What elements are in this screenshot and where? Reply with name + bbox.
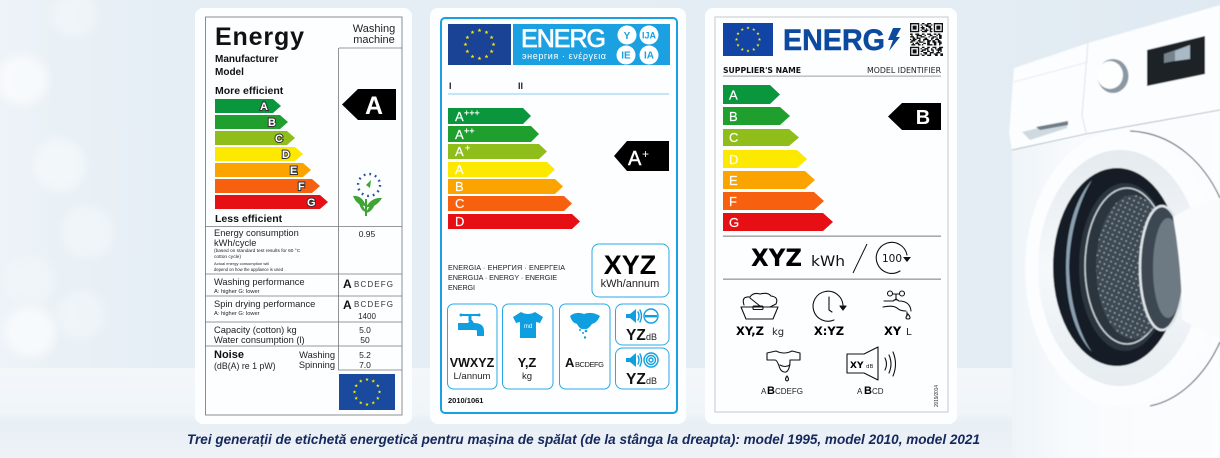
multilingual energy text: ENERGIJA · ENERGY · ENERGIE — [448, 273, 557, 282]
spinning noise box — [616, 348, 669, 389]
icon: EU flag — [723, 23, 773, 56]
capacity icon and value: kg — [772, 327, 784, 338]
annual consumption box: XYZ — [604, 250, 656, 280]
noise row: (dB(A) re 1 pW) — [214, 361, 276, 371]
energy scale bars: D — [455, 214, 464, 229]
energy consumption row: depend on how the appliance is used — [214, 267, 284, 272]
energy banner: ENERG — [521, 25, 606, 53]
noise icon and value: B — [864, 385, 872, 397]
icon: wet shirt — [570, 313, 600, 339]
display — [1147, 36, 1205, 86]
duration icon and value: X:YZ — [814, 324, 844, 338]
energy per 100 cycles — [751, 242, 911, 273]
panel: 2021 label card — [705, 8, 957, 424]
bokeh lights — [0, 0, 114, 357]
icon: EU flag — [448, 24, 511, 65]
water consumption box — [448, 304, 497, 389]
spin efficiency box — [560, 304, 610, 389]
energy banner: IE — [621, 50, 631, 62]
washing performance row — [214, 277, 393, 295]
program knob — [1097, 59, 1128, 93]
energy consumption row: (based on standard test results for 60 °C — [214, 248, 301, 254]
regulation number: 2010/1061 — [448, 396, 483, 405]
spin efficiency box: BCDEFG — [575, 360, 604, 369]
energy scale bars: B — [268, 117, 276, 129]
rating arrow B: B — [916, 107, 930, 129]
energy scale bars: A — [260, 101, 268, 113]
duration icon and value — [813, 291, 846, 338]
spin drying performance row: 1400 — [358, 312, 376, 321]
noise row: Noise — [214, 349, 244, 361]
energy scale bars: B — [455, 179, 464, 194]
noise icon and value — [847, 347, 896, 397]
icon: 100 cycles: 100 — [882, 253, 902, 265]
model identifier: MODEL IDENTIFIER — [867, 66, 941, 75]
door handle — [1173, 198, 1220, 338]
capacity box — [502, 304, 553, 389]
water icon and value — [883, 291, 912, 338]
spin class icon and value: A — [761, 387, 767, 396]
energy scale bars: G — [307, 197, 316, 209]
noise icon and value: XY — [850, 361, 864, 371]
energy per 100 cycles: XYZ — [751, 244, 802, 272]
energy consumption row: cotton cycle) — [214, 254, 241, 260]
spin drying performance row — [214, 298, 393, 321]
table lines — [205, 48, 402, 370]
supplier and model placeholders: I — [449, 81, 452, 91]
spinning noise box: dB — [646, 376, 657, 386]
noise row: 7.0 — [359, 360, 371, 370]
water consumption box: VWXYZ — [450, 356, 495, 370]
capacity and water rows: 50 — [360, 335, 370, 345]
noise icon and value: dB — [866, 364, 873, 370]
capacity and water rows: Capacity (cotton) kg — [214, 325, 297, 335]
water icon and value: L — [906, 327, 912, 338]
energy scale bars: +++ — [464, 108, 480, 118]
energy scale bars: C — [729, 130, 738, 145]
machine body — [1012, 100, 1220, 458]
capacity and water rows: 5.0 — [359, 325, 371, 335]
icon: laundry basket — [741, 293, 778, 319]
energy scale bars: A — [455, 127, 464, 142]
energy banner: энергия · ενέργεια — [522, 51, 606, 61]
icon: speaker and spin cycle — [626, 353, 658, 367]
icon: QR code — [910, 23, 943, 56]
energy scale bars: A — [455, 144, 464, 159]
heading: ENERG — [783, 24, 885, 57]
icon: water tap — [458, 314, 484, 336]
water consumption box: L/annum — [454, 371, 491, 382]
rating arrow A+: A — [628, 148, 642, 170]
washing noise box — [616, 304, 669, 345]
energy scale bars: A — [729, 88, 738, 102]
washing performance row: BCDEFG — [354, 280, 393, 289]
energy per 100 cycles: kWh — [811, 254, 845, 270]
multilingual energy text: ENERGIA · ЕНЕРГИЯ · ΕΝΕΡΓΕΙΑ — [448, 263, 565, 272]
energy scale bars: D — [282, 149, 290, 161]
energy banner — [513, 24, 670, 65]
energy scale bars: ++ — [464, 126, 475, 136]
rating arrow B — [888, 103, 941, 130]
caption: Trei generații de etichetă energetică pentru mașina de spălat (de la stânga la dreapta): model 1995, model 2010, model 2021 — [187, 432, 980, 447]
energy consumption row: Energy consumption — [214, 228, 299, 238]
spinning noise box: YZ — [626, 371, 646, 388]
energy scale bars: F — [298, 181, 305, 193]
regulation number: 2019/2014 — [934, 385, 940, 407]
energy scale bars: C — [455, 196, 464, 211]
energy scale bars: D — [729, 152, 738, 167]
energy scale bars: A — [455, 109, 464, 124]
annual consumption box — [592, 244, 669, 297]
supplier and model placeholders — [449, 81, 523, 91]
supplier and model placeholders: II — [518, 81, 523, 91]
icon: wet shirt — [767, 351, 800, 381]
energy consumption row: 0.95 — [359, 229, 376, 239]
washing noise box: dB — [646, 332, 657, 342]
energy scale bars: A — [455, 162, 464, 177]
energy scale bars — [723, 85, 833, 231]
noise icon and value: A — [857, 387, 863, 396]
energy scale bars: B — [729, 109, 738, 124]
multilingual energy text — [448, 263, 565, 292]
noise row: Washing — [299, 350, 335, 360]
rating arrow A+ — [614, 141, 669, 171]
washing noise box: YZ — [626, 327, 646, 344]
door ring — [1025, 131, 1219, 407]
energy scale bars — [215, 99, 328, 209]
detergent drawer handle — [1022, 121, 1068, 140]
energy scale bars — [448, 108, 580, 229]
noise row — [214, 349, 371, 371]
energy consumption row: Actual energy consumption will — [214, 261, 269, 266]
energy scale bars: E — [290, 165, 297, 177]
control panel — [1009, 5, 1220, 150]
annual consumption box: kWh/annum — [601, 278, 659, 290]
manufacturer and model: More efficient — [215, 85, 284, 97]
capacity box: Y,Z — [518, 355, 536, 370]
icon: clock — [813, 291, 846, 321]
capacity and water rows — [214, 325, 371, 345]
energy scale bars: + — [465, 143, 470, 153]
icon: tap with drop — [883, 291, 911, 319]
energy banner: IJA — [642, 30, 656, 40]
energy scale bars: F — [729, 194, 737, 209]
manufacturer and model: Less efficient — [215, 213, 283, 225]
capacity icon and value — [736, 293, 784, 338]
icon: EU flag — [339, 374, 395, 410]
appliance type: Washing — [353, 23, 395, 35]
icon: speaker — [847, 347, 896, 380]
washing machine photo — [1009, 5, 1220, 458]
spin class icon and value: CDEFG — [775, 387, 803, 396]
manufacturer and model — [215, 54, 284, 225]
rating arrow A+: + — [642, 147, 649, 161]
spin drying performance row: Spin drying performance — [214, 299, 315, 309]
floor — [0, 368, 1220, 458]
icon: 100 cycles — [876, 242, 911, 273]
washing performance row: A — [343, 277, 352, 291]
icon: speaker and wash cycle — [626, 309, 658, 323]
rating arrow A: A — [365, 92, 383, 120]
energy banner: IA — [644, 50, 654, 62]
icon: t-shirt: md — [524, 324, 532, 330]
spin efficiency box: A — [565, 355, 575, 370]
spin drying performance row: A: higher G: lower — [214, 311, 260, 317]
noise row: 5.2 — [359, 350, 371, 360]
spin class icon and value: B — [767, 385, 775, 397]
energy consumption row: kWh/cycle — [214, 238, 256, 248]
panel: 1995 label card — [195, 8, 412, 424]
supplier name: SUPPLIER'S NAME — [723, 66, 801, 75]
appliance type: machine — [353, 34, 395, 46]
icon: lightning bolt — [888, 28, 901, 51]
water icon and value: XY — [884, 324, 902, 338]
heading: Energy — [215, 23, 304, 51]
energy banner: Y — [624, 31, 631, 42]
manufacturer and model: Model — [215, 67, 244, 78]
spin drying performance row: A — [343, 298, 352, 312]
capacity and water rows: Water consumption (l) — [214, 335, 305, 345]
capacity box: kg — [522, 371, 532, 382]
energy scale bars: E — [729, 173, 738, 188]
energy scale bars: C — [275, 133, 283, 145]
noise row: Spinning — [299, 360, 335, 370]
washing performance row: A: higher G: lower — [214, 289, 260, 295]
washing performance row: Washing performance — [214, 277, 305, 287]
energy scale bars: G — [729, 215, 739, 230]
spin drying performance row: BCDEFG — [354, 300, 393, 309]
manufacturer and model: Manufacturer — [215, 54, 278, 65]
energy consumption row — [214, 228, 376, 272]
noise icon and value: CD — [872, 387, 884, 396]
multilingual energy text: ENERGI — [448, 283, 475, 292]
drum — [1053, 168, 1184, 366]
capacity icon and value: XY,Z — [736, 324, 764, 338]
appliance type — [353, 23, 395, 46]
icon: EU ecolabel flower — [353, 174, 382, 216]
panel: 2010 label card — [430, 8, 686, 424]
spin class icon and value — [761, 351, 803, 397]
rating arrow A — [342, 89, 396, 120]
